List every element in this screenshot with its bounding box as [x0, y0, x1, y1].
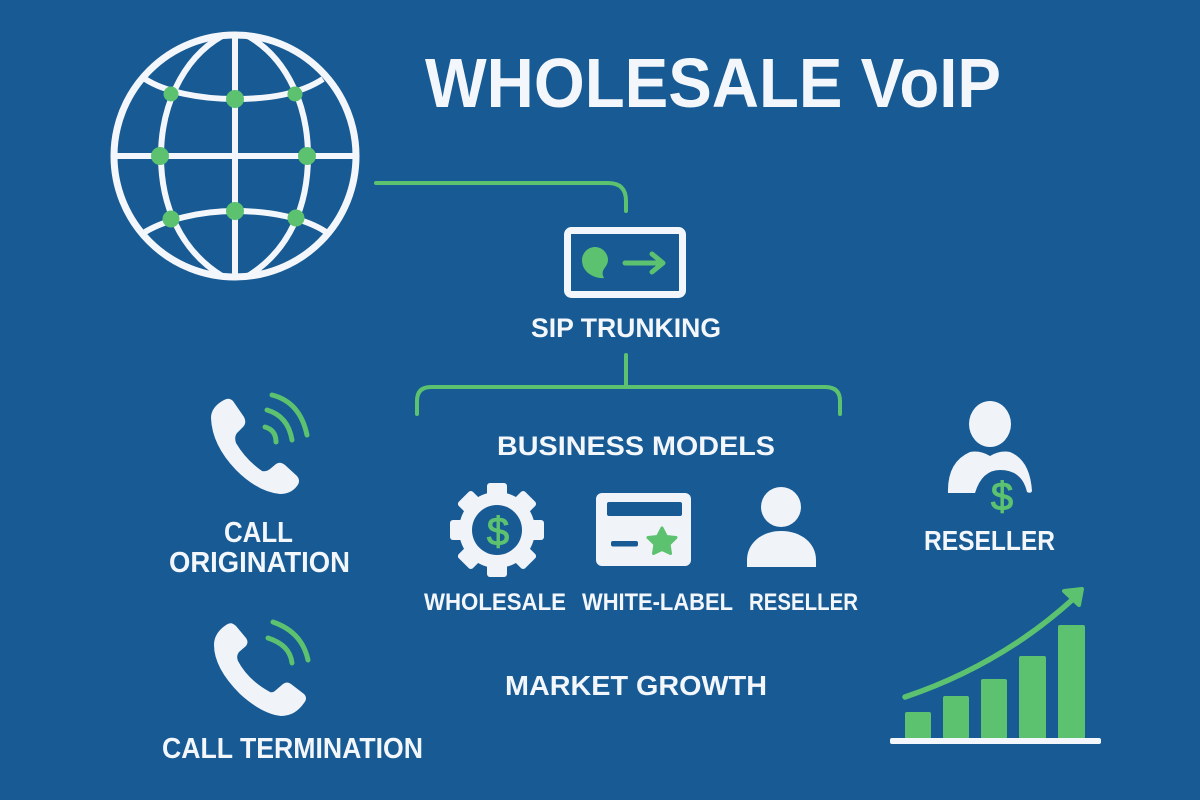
icon: network globe [114, 35, 356, 277]
arrow: growth trend [905, 589, 1082, 697]
heading: market growth: MARKET GROWTH [505, 670, 767, 701]
icon: wholesale gear [450, 483, 544, 577]
title: WHOLESALE VoIP [425, 44, 1001, 122]
icon: reseller with dollar: $ [991, 475, 1013, 519]
bar chart: market growth [890, 589, 1101, 744]
icon: reseller with dollar [948, 401, 1032, 519]
icon: call origination phone [211, 395, 307, 494]
label: SIP trunking: SIP TRUNKING [531, 313, 721, 343]
icon: reseller person [747, 487, 816, 567]
heading: business models: BUSINESS MODELS [497, 431, 775, 461]
arrow: connector from globe to SIP trunk [376, 183, 626, 211]
label: white-label: WHITE-LABEL [582, 589, 733, 616]
icon: call termination phone [214, 622, 308, 716]
label: reseller right: RESELLER [924, 525, 1055, 556]
label: call termination: CALL TERMINATION [162, 733, 423, 765]
label: call origination [169, 517, 350, 579]
icon: SIP trunk box [568, 230, 682, 294]
label: wholesale: WHOLESALE [424, 589, 566, 616]
icon: white-label card [596, 493, 691, 566]
label: reseller: RESELLER [749, 589, 858, 616]
arrow: bracket to business models [417, 355, 840, 414]
label: call origination: ORIGINATION [169, 547, 350, 579]
icon: wholesale gear: $ [487, 510, 509, 554]
label: call origination: CALL [224, 517, 293, 549]
